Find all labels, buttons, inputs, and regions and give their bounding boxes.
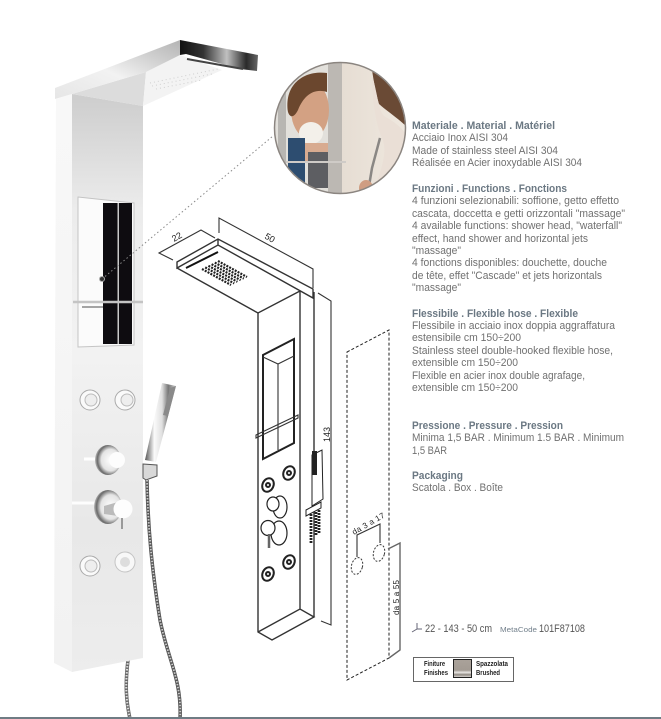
section: functions: "massage" [412,282,461,294]
finishes labels [424,659,448,677]
section: pressure: Pressione . Pressure . Pression [412,420,563,432]
man's cheek [374,80,404,142]
section: flexible hose: Stainless steel double-hooked flexible hose, [412,345,613,357]
finishes labels: Finiture [424,659,445,668]
section: packaging: Packaging [412,470,463,482]
line hand shower [306,450,323,543]
line knob lower [261,520,287,548]
section: flexible hose: extensible cm 150÷200 [412,382,518,394]
waterfall head underside [143,55,222,106]
niche frame [78,197,134,347]
dimension 143 [318,293,332,625]
dotted callout line [102,136,273,279]
section: functions [412,183,625,294]
section: material: Acciaio Inox AISI 304 [412,132,508,144]
body jet top right [115,390,135,410]
metacode label: MetaCode [500,625,537,634]
circular photo: man shaving in mirror [274,62,408,196]
section: functions: 4 available functions: shower head, "waterfall" [412,220,622,232]
brushed labels [476,659,509,677]
dimension 50 [219,218,313,288]
waterfall head top [55,40,180,99]
head outline [177,239,313,313]
hole spacing dimension [350,511,387,557]
finishes labels: Finishes [424,668,448,677]
bar shadow [82,306,103,308]
dark bottle [308,152,328,188]
hand shower [143,383,176,480]
finishes legend [414,658,514,682]
section: functions: 4 funzioni selezionabili: soffione, getto effetto [412,195,619,207]
section: pressure [412,420,624,457]
towel bar [73,301,143,303]
section: functions: cascata, doccetta e getti orizzontali "massage" [412,208,625,220]
section: flexible hose: extensible cm 150÷200 [412,357,518,369]
body jet top left [80,390,100,410]
hand shower hose [147,480,180,719]
dimensions text: 22 - 143 - 50 cm [425,623,492,635]
section: functions: Funzioni . Functions . Fonctions [412,183,567,195]
section: material: Réalisée en Acier inoxydable AISI 304 [412,157,582,169]
hand [359,180,372,190]
body jet bottom left [80,556,100,576]
hole height dimension: da 5 a 55 [392,579,401,615]
dimension 22: 22 [170,230,184,244]
mirror shelf [284,161,346,163]
head front slot [186,252,218,268]
mirror left edge [278,92,286,164]
mixer knob [72,490,132,529]
diverter knob [84,445,125,475]
bottom rule [0,717,661,719]
section: flexible hose: Flexible en acier inox double agrafage, [412,370,585,382]
circle outline [274,62,406,194]
reflected face [292,90,329,134]
panel divider [118,203,119,344]
waterfall head front edge [180,40,258,71]
brushed labels: Spazzolata [476,659,509,668]
section: functions: "massage" [412,245,461,257]
section: packaging: Scatola . Box . Boîte [412,482,503,494]
technical line drawing [159,218,401,680]
blue bottle [288,138,305,184]
dimension 22 [159,230,215,260]
section: flexible hose: Flessibile . Flexible hose . Flexible [412,308,578,320]
section: material: Made of stainless steel AISI 304 [412,145,558,157]
wall holes [349,543,387,576]
wall [342,62,408,194]
towel bar [256,415,298,438]
callout ring on niche [100,276,104,282]
panel side face [54,94,72,672]
niche [263,339,294,459]
hole spacing dimension: da 3 a 17 [350,511,387,537]
specification text [412,120,625,494]
spray dots [150,69,218,89]
legend frame [414,658,514,682]
head nozzles [202,261,247,285]
lower exit hose [126,660,130,719]
mirror background [275,64,328,192]
section: material [412,120,582,169]
line jets [260,464,297,583]
dimension 50: 50 [263,231,277,245]
section: pressure: Minima 1,5 BAR . Minimum 1.5 BAR . Minimum [412,432,624,444]
section: packaging [412,470,503,494]
photo: shower panel [54,40,258,719]
brushed labels: Brushed [476,668,500,677]
section: flexible hose: estensibile cm 150÷200 [412,332,521,344]
reflected hair [287,73,327,116]
panel outline [258,291,314,640]
section: pressure: 1,5 BAR [412,445,447,457]
mirror frame [328,62,342,194]
section: functions: de tête, effet "Cascade" et jets horizontals [412,270,602,282]
line knob upper [267,496,287,518]
wall cut-out dashed rectangle [347,330,389,680]
panel front face [72,94,143,672]
shaving foam [299,122,323,144]
icon: dimensions axes [412,623,422,632]
razor [369,138,380,186]
metacode value: 101F87108 [539,623,585,635]
shaded underside triangle [72,72,146,106]
section: material: Materiale . Material . Matériel [412,120,555,132]
reflected chest [305,143,328,161]
niche inner lines [263,356,294,450]
man's head foreground [372,72,405,125]
dimension 143: 143 [322,427,332,442]
black mirror panels [103,203,132,344]
body jet bottom right [115,552,135,572]
section: flexible hose [412,308,616,394]
section: functions: 4 fonctions disponibles: douchette, douche [412,257,607,269]
section: flexible hose: Flessibile in acciaio inox doppia aggraffatura [412,320,616,332]
brushed swatch [454,660,472,678]
nozzle bar [187,59,243,69]
niche [73,197,143,347]
hole height dimension [388,543,401,658]
section: functions: effect, hand shower and horizontal jets [412,233,588,245]
